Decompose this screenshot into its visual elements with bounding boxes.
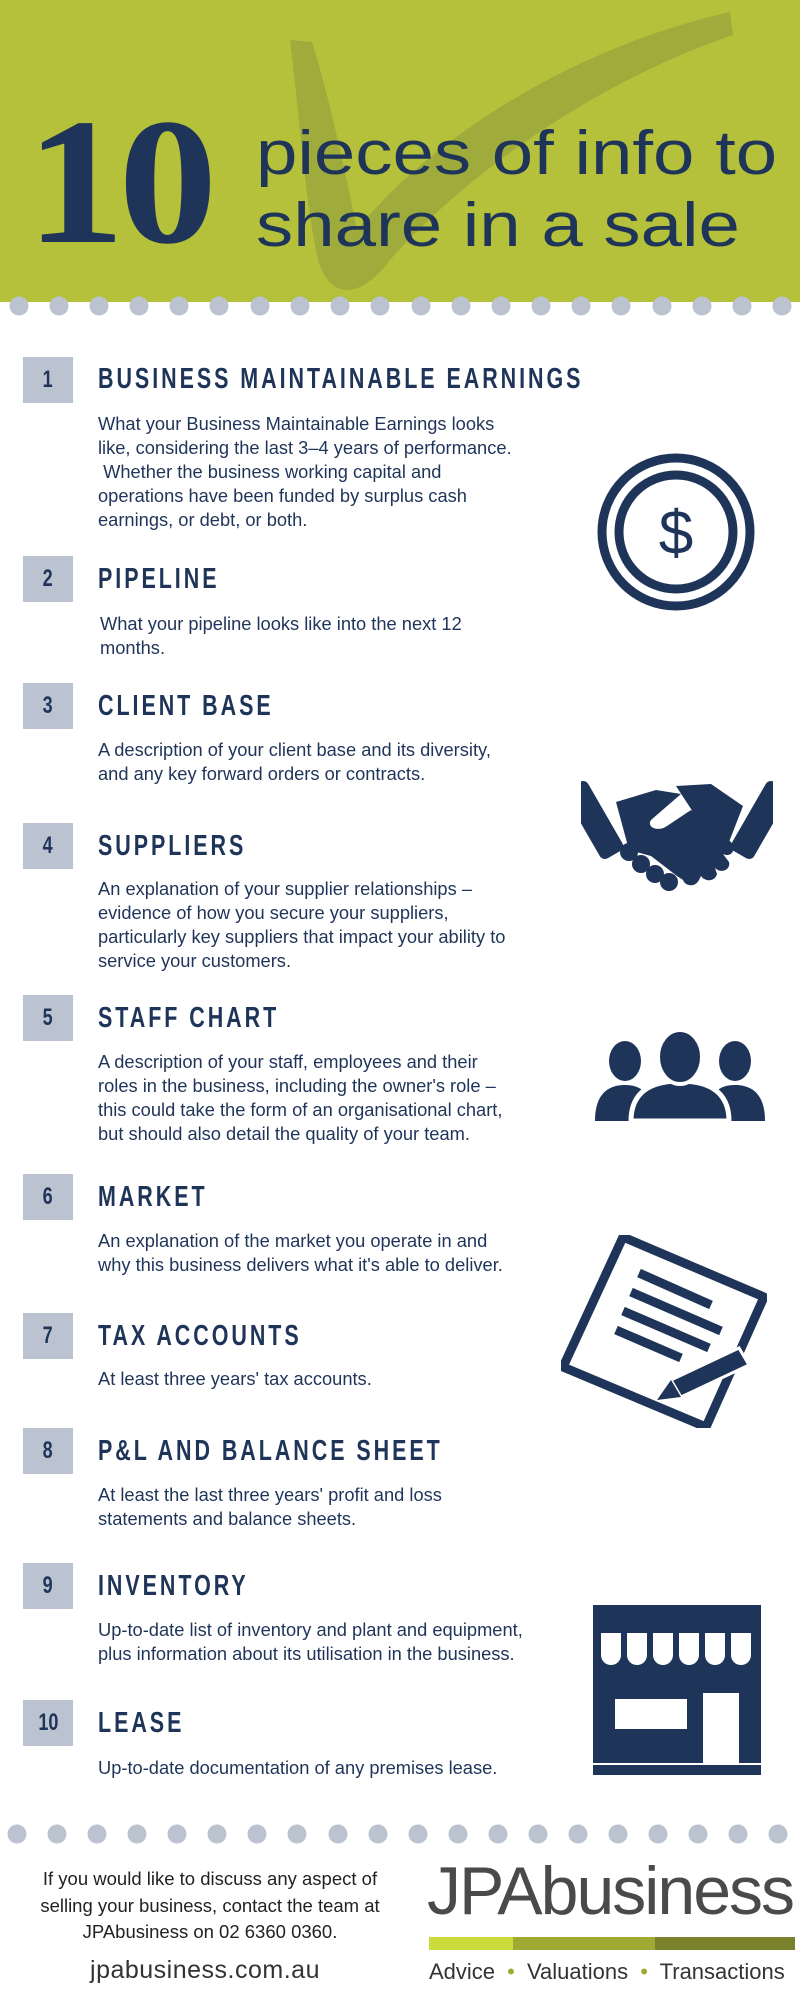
title text bbox=[256, 119, 777, 260]
header banner bbox=[0, 0, 800, 302]
number box 6: 6 bbox=[43, 1183, 53, 1210]
text 1: What your Business Maintainable Earnings looks like, considering the last 3–4 years of performance. Whether the business working capital and operations have been funded by surplus cash earnings, or debt, or both. bbox=[98, 413, 512, 530]
item 9 bbox=[23, 1563, 523, 1664]
title text: pieces of info to bbox=[256, 119, 777, 188]
item 5 bbox=[23, 995, 502, 1144]
heading 7: TAX ACCOUNTS bbox=[98, 1320, 302, 1352]
text 3: A description of your client base and its diversity, and any key forward orders or contracts. bbox=[98, 739, 491, 784]
item 2 bbox=[23, 556, 462, 658]
heading 8: P&L AND BALANCE SHEET bbox=[98, 1435, 443, 1467]
footer contact text bbox=[40, 1868, 380, 1942]
text 9: plus information about its utilisation in the business. bbox=[98, 1643, 515, 1664]
number box 3 bbox=[23, 683, 73, 729]
text 5: A description of your staff, employees and their bbox=[98, 1051, 478, 1072]
number box 9: 9 bbox=[43, 1572, 53, 1599]
number box 8: 8 bbox=[43, 1437, 53, 1464]
text 8: At least the last three years' profit and loss statements and balance sheets. bbox=[98, 1484, 442, 1529]
number box 5 bbox=[23, 995, 73, 1041]
icon: store front bbox=[593, 1605, 761, 1775]
heading 2: PIPELINE bbox=[98, 563, 219, 595]
text 9: Up-to-date list of inventory and plant and equipment, bbox=[98, 1619, 523, 1640]
logo wordmark: JPAbusiness bbox=[427, 1853, 793, 1929]
icon: dollar coin: $ bbox=[659, 499, 693, 568]
item 8 bbox=[23, 1428, 443, 1529]
item 10 bbox=[23, 1700, 497, 1778]
footer contact text: JPAbusiness on 02 6360 0360. bbox=[83, 1921, 337, 1942]
footer website: jpabusiness.com.au bbox=[90, 1956, 320, 1984]
icon: handshake bbox=[581, 781, 773, 891]
number box 3: 3 bbox=[43, 692, 53, 719]
footer contact text: If you would like to discuss any aspect of bbox=[43, 1868, 377, 1889]
text 2 bbox=[100, 613, 462, 658]
number box 1 bbox=[23, 357, 73, 403]
item 7 bbox=[23, 1313, 372, 1389]
number box 10: 10 bbox=[38, 1709, 58, 1736]
title text: share in a sale bbox=[256, 191, 740, 260]
text 5: but should also detail the quality of your team. bbox=[98, 1123, 470, 1144]
text 2: months. bbox=[100, 637, 165, 658]
item 3 bbox=[23, 683, 491, 784]
footer contact text: selling your business, contact the team at bbox=[40, 1894, 380, 1916]
heading 10: LEASE bbox=[98, 1707, 184, 1739]
number box 2 bbox=[23, 556, 73, 602]
item 1 bbox=[23, 357, 583, 530]
text 2: What your pipeline looks like into the next 12 bbox=[100, 613, 462, 634]
number box 10 bbox=[23, 1700, 73, 1746]
number box 7 bbox=[23, 1313, 73, 1359]
number box 6 bbox=[23, 1174, 73, 1220]
title number 10: 10 bbox=[26, 82, 211, 281]
icon: people bbox=[595, 1032, 765, 1121]
heading 4: SUPPLIERS bbox=[98, 830, 246, 862]
logo bbox=[427, 1853, 795, 1984]
heading 1: BUSINESS MAINTAINABLE EARNINGS bbox=[98, 363, 583, 395]
logo bars bbox=[429, 1937, 795, 1950]
number box 5: 5 bbox=[43, 1004, 53, 1031]
text 5: roles in the business, including the owner's role – bbox=[98, 1075, 496, 1096]
text 4: An explanation of your supplier relationships – evidence of how you secure your suppliers, particularly key suppliers that impact your ability to service your customers. bbox=[98, 878, 505, 971]
item 6 bbox=[23, 1174, 503, 1275]
heading 5: STAFF CHART bbox=[98, 1002, 279, 1034]
number box 8 bbox=[23, 1428, 73, 1474]
heading 6: MARKET bbox=[98, 1181, 208, 1213]
number box 2: 2 bbox=[43, 565, 53, 592]
text 5 bbox=[98, 1051, 502, 1144]
text 7: At least three years' tax accounts. bbox=[98, 1368, 372, 1389]
text 6: why this business delivers what it's able to deliver. bbox=[98, 1254, 503, 1275]
heading 9: INVENTORY bbox=[98, 1570, 249, 1602]
icon: dollar coin bbox=[598, 454, 754, 610]
text 6: An explanation of the market you operate in and bbox=[98, 1230, 487, 1251]
number box 9 bbox=[23, 1563, 73, 1609]
text 6 bbox=[98, 1230, 503, 1275]
number box 1: 1 bbox=[43, 366, 53, 393]
text 10: Up-to-date documentation of any premises lease. bbox=[98, 1757, 497, 1778]
number box 4: 4 bbox=[43, 832, 53, 859]
icon: document with pencil bbox=[561, 1235, 767, 1428]
icon: background checkmark bbox=[290, 12, 733, 290]
heading 3: CLIENT BASE bbox=[98, 690, 274, 722]
number box 7: 7 bbox=[43, 1322, 53, 1349]
number box 4 bbox=[23, 823, 73, 869]
dots divider top bbox=[10, 296, 792, 316]
text 5: this could take the form of an organisational chart, bbox=[98, 1099, 502, 1120]
text 9 bbox=[98, 1619, 523, 1664]
dots divider bottom bbox=[8, 1824, 788, 1844]
logo tagline: Advice • Valuations • Transactions bbox=[429, 1959, 785, 1984]
item 4 bbox=[23, 823, 505, 971]
